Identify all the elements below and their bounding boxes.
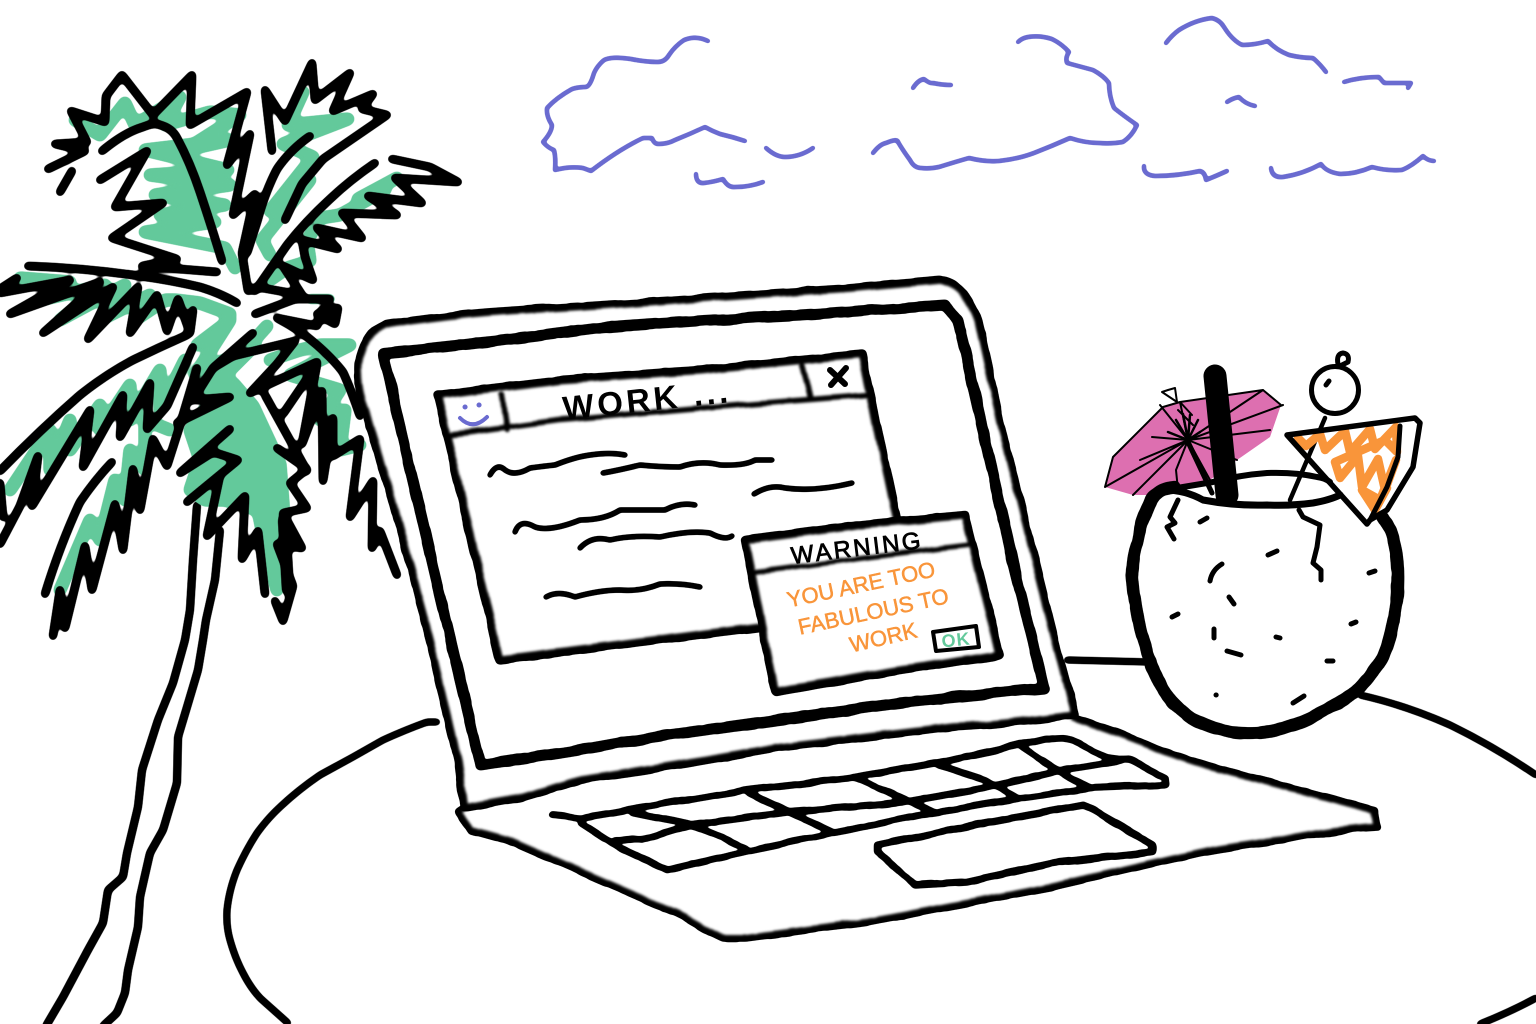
dialog title: WARNING	[790, 527, 925, 570]
laptop base	[458, 718, 1377, 938]
close icon	[830, 368, 846, 385]
keyboard	[553, 738, 1166, 870]
clouds	[543, 18, 1434, 187]
dialog frame	[745, 515, 1000, 692]
cherry	[1312, 353, 1358, 414]
touchpad	[878, 805, 1153, 885]
text placeholder lines	[490, 454, 852, 597]
window frame	[437, 354, 897, 660]
laptop screen bezel	[383, 305, 1044, 765]
ok button	[933, 626, 979, 651]
coconut speckles	[1172, 518, 1375, 703]
table	[227, 660, 1536, 1024]
ok button: OK	[941, 629, 971, 651]
coconut cracks	[1167, 500, 1321, 580]
dialog message: FABULOUS TO	[796, 583, 951, 640]
window: work	[437, 354, 897, 660]
green palm scribbles	[10, 92, 397, 590]
warning dialog	[745, 515, 1000, 692]
dialog message	[785, 557, 951, 657]
coconut shell	[1132, 487, 1398, 733]
laptop	[358, 280, 1377, 938]
smiley icon	[460, 405, 487, 424]
coconut rim	[1165, 473, 1340, 505]
palm tree	[0, 63, 458, 1024]
black palm fronds	[0, 63, 458, 636]
paper umbrella	[1105, 388, 1283, 495]
straw	[1215, 376, 1227, 495]
palm trunk	[46, 505, 220, 1024]
fruit stick	[1290, 418, 1325, 500]
coconut drink	[1105, 353, 1420, 733]
laptop lid outer	[358, 280, 1075, 808]
title: work: WORK ...	[561, 372, 733, 427]
dialog message: WORK	[847, 618, 920, 657]
dialog message: YOU ARE TOO	[785, 557, 937, 612]
citrus wedge	[1287, 418, 1420, 524]
